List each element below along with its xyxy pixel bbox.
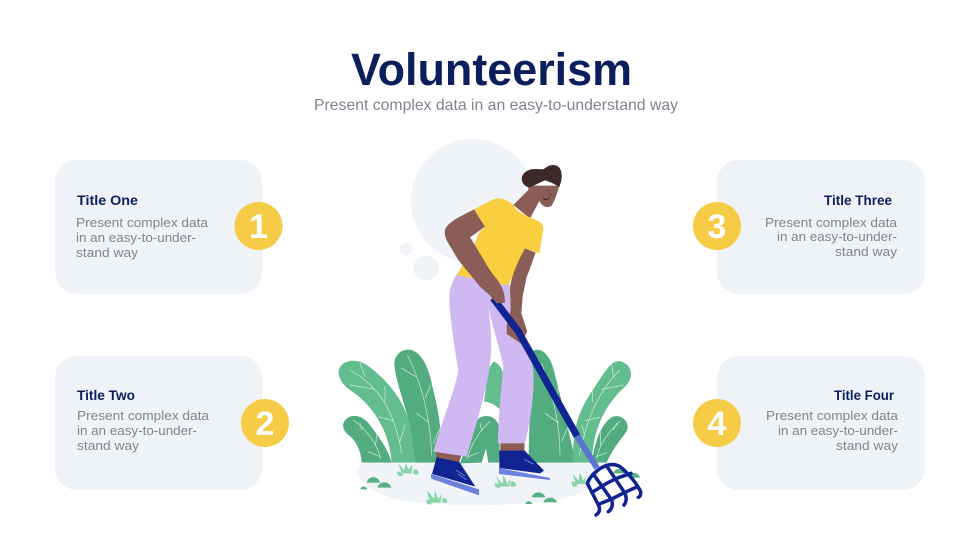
ground	[358, 463, 599, 505]
handle	[493, 298, 577, 436]
pants	[433, 274, 534, 457]
panel: title four: Present complex data	[766, 408, 899, 423]
illustration: background circles	[400, 139, 535, 280]
panel: title four: in an easy-to-under-	[778, 423, 898, 438]
panel: title four: 4	[708, 405, 727, 443]
panel: title three: 3	[708, 208, 726, 246]
rake	[493, 298, 641, 515]
handle lower	[577, 436, 597, 468]
plants	[339, 350, 631, 463]
panel: title three: Title Three	[824, 192, 892, 208]
panel: title four: stand way	[836, 438, 899, 453]
grass tufts	[397, 463, 586, 504]
panel: title four	[693, 356, 925, 490]
title: Volunteerism	[351, 44, 632, 95]
panel: title one: stand way	[76, 245, 139, 260]
leaf veins	[350, 355, 623, 458]
panel: title three: Present complex data	[765, 215, 898, 230]
panel: title four: Title Four	[834, 387, 895, 403]
panel: title one: Present complex data	[76, 215, 209, 230]
panel: title three	[693, 160, 925, 294]
hair	[522, 165, 562, 187]
panel: title one: in an easy-to-under-	[76, 230, 196, 245]
legs shoes	[431, 442, 550, 495]
panel: title two: stand way	[77, 438, 140, 453]
fork	[587, 465, 641, 515]
facial marks	[543, 190, 551, 200]
torso	[457, 198, 543, 343]
panel: title two: in an easy-to-under-	[77, 423, 197, 438]
right arm	[507, 248, 536, 343]
mounds	[360, 469, 640, 504]
panel: title three: in an easy-to-under-	[777, 229, 897, 244]
panel: title two: Present complex data	[77, 408, 210, 423]
shirt	[457, 198, 543, 285]
panel: title one: Title One	[77, 192, 138, 208]
panel: title three: stand way	[835, 244, 898, 259]
panel: title two: 2	[256, 405, 274, 443]
subtitle: Present complex data in an easy-to-understand way	[314, 97, 678, 114]
panel: title one: 1	[249, 208, 268, 246]
neck and face	[513, 186, 559, 218]
illustration: ground and plants	[339, 350, 640, 505]
head and neck	[513, 165, 562, 218]
illustration: person	[431, 165, 641, 515]
panel: title two: Title Two	[77, 387, 135, 403]
left arm	[445, 209, 505, 303]
panel: title one	[55, 160, 282, 294]
panel: title two	[55, 356, 289, 490]
